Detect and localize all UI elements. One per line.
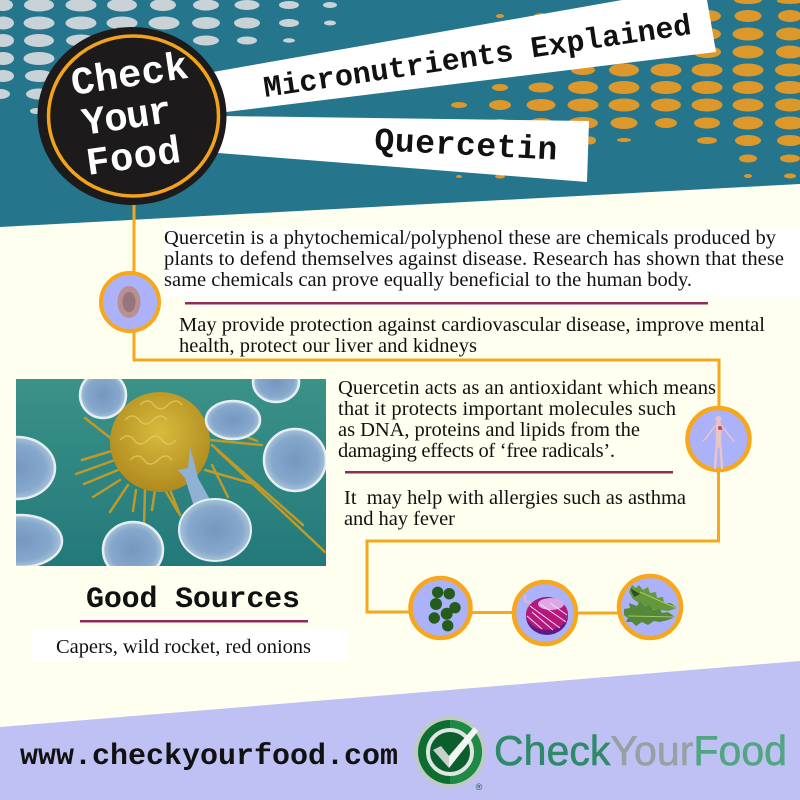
heading: Good Sources: Good Sources <box>86 583 300 617</box>
footer band <box>0 661 800 800</box>
text: allergies <box>344 487 686 530</box>
text: sources <box>31 630 348 661</box>
connector lines <box>134 205 719 613</box>
intro panel: plants to defend themselves against disease. Research has shown that these <box>164 248 784 270</box>
icon: human body <box>688 408 750 470</box>
logo mark <box>414 716 486 792</box>
divider <box>80 620 308 622</box>
intro panel <box>164 227 800 297</box>
logo badge: Check Your Food <box>38 27 226 205</box>
banner: Quercetin: Quercetin <box>373 123 558 170</box>
logo mark: ® <box>476 782 483 792</box>
logo badge: Check Your Food: Check <box>68 46 191 107</box>
text: allergies: and hay fever <box>344 508 455 530</box>
text: antioxidant: as DNA, proteins and lipids from the <box>338 419 640 441</box>
icon: capers <box>410 578 470 638</box>
icon: red onion <box>514 582 576 644</box>
divider <box>185 302 708 304</box>
text: sources: Capers, wild rocket, red onions <box>56 636 311 658</box>
text: antioxidant: that it protects important molecules such <box>338 398 676 420</box>
website url: www.checkyourfood.com <box>20 740 398 774</box>
text: antioxidant <box>338 377 716 462</box>
divider <box>345 471 673 474</box>
text: protection benefits: health, protect our liver and kidneys <box>179 335 477 357</box>
text: protection benefits <box>179 314 765 357</box>
text: allergies: It may help with allergies such as asthma <box>344 487 686 509</box>
header band <box>0 0 800 227</box>
text: protection benefits: May provide protection against cardiovascular disease, improve mental <box>179 314 765 336</box>
banner: Micronutrients Explained: Micronutrients Explained <box>261 10 694 107</box>
banner: Quercetin <box>218 116 589 182</box>
logo badge: Check Your Food: Food <box>84 130 184 187</box>
intro panel: same chemicals can prove equally beneficial to the human body. <box>164 269 692 291</box>
intro panel: Quercetin is a phytochemical/polyphenol these are chemicals produced by <box>164 227 777 249</box>
logo badge: Check Your Food: Your <box>79 90 175 147</box>
photo: immune cells attacking a cancer cell <box>0 362 326 578</box>
icon: cell <box>101 273 159 331</box>
text: antioxidant: damaging effects of ‘free radicals’. <box>338 440 615 462</box>
icon: wild rocket <box>619 576 681 638</box>
logo wordmark: CheckYourFood <box>494 727 787 774</box>
text: antioxidant: Quercetin acts as an antioxidant which means <box>338 377 716 399</box>
